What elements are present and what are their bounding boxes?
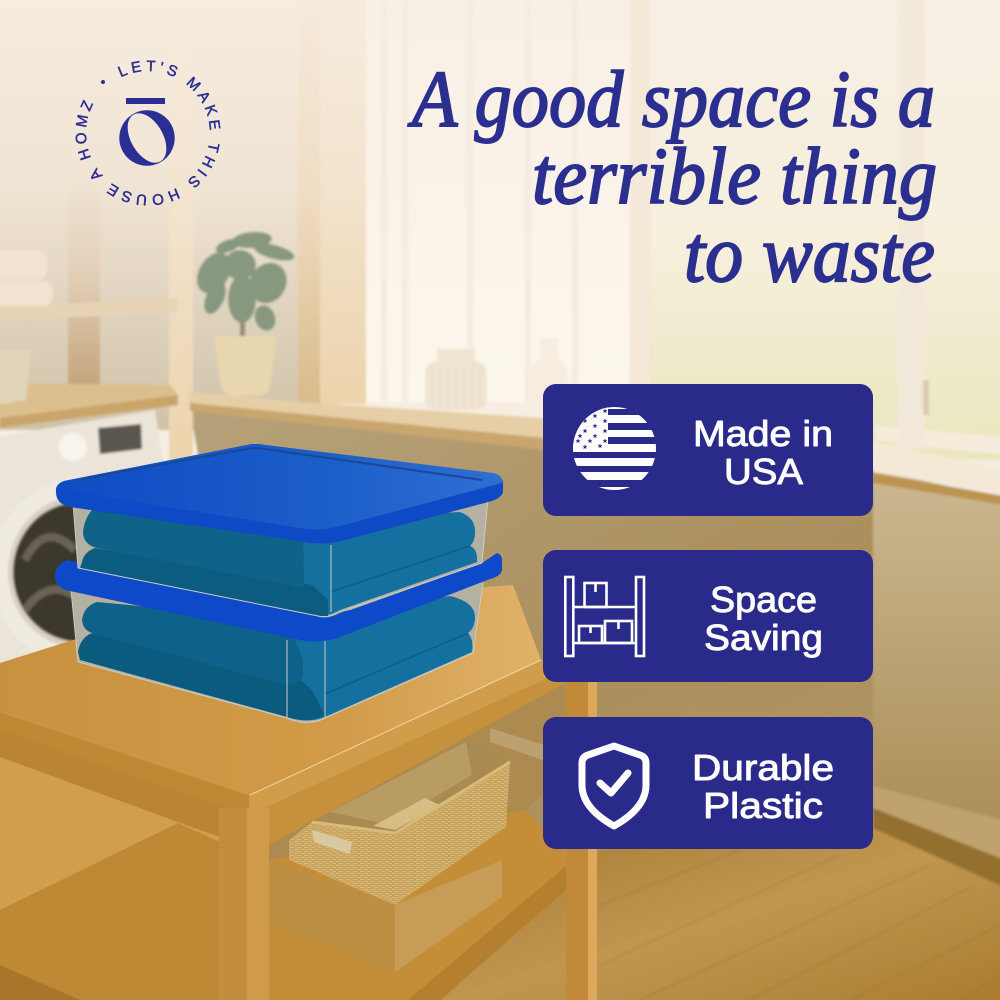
lid top surface (58, 444, 502, 530)
plant leaves (190, 230, 296, 337)
floor (430, 828, 1000, 1000)
lower blanket right (280, 596, 475, 720)
recessed lip (80, 448, 482, 482)
storage box lower (269, 860, 502, 972)
headline: A good space is a (407, 56, 935, 144)
ceramic vase (425, 349, 487, 410)
panel: durable plastic (543, 717, 873, 849)
woven basket (289, 740, 510, 905)
label: Durable (692, 747, 834, 788)
baseboard shadow (873, 808, 1000, 892)
lower table shelf left (0, 823, 220, 1000)
stacked storage bins (55, 444, 503, 722)
lower blanket upper roll (82, 602, 303, 685)
table apron right (240, 660, 565, 850)
lower wall (190, 410, 1000, 890)
wicker basket on shelf (0, 350, 32, 405)
upper lid (56, 444, 503, 544)
upper bin clear body (73, 495, 488, 617)
side table (0, 585, 597, 1000)
shelf front corner left (0, 965, 80, 1000)
lower bin edge (71, 583, 483, 722)
label (692, 747, 834, 826)
logo badge (76, 60, 220, 206)
skirting behind table (490, 728, 566, 768)
headline (407, 56, 937, 299)
upper bin (73, 495, 488, 617)
table top surface (0, 585, 541, 795)
panel: space saving (543, 550, 873, 682)
plant pot (214, 336, 277, 396)
upper blanket fold (330, 546, 470, 592)
panel: made in usa (543, 384, 873, 516)
soap bottle (528, 338, 568, 404)
left alcove wall (0, 0, 310, 430)
sheer curtain (362, 0, 650, 405)
dark wall between apron and shelf (268, 675, 565, 860)
lower blanket fold (325, 633, 468, 694)
label: Made in (693, 413, 833, 454)
baseboard (873, 786, 1000, 862)
right rear leg (566, 680, 597, 1000)
long wooden shelf (188, 392, 545, 450)
sill wood edge (873, 473, 1000, 506)
icon: american flag circle (572, 407, 658, 491)
lower left shelf (0, 383, 178, 428)
headline: terrible thing (532, 133, 937, 221)
label: USA (724, 451, 803, 492)
lower shelf front edge (408, 860, 573, 1000)
icon: shield with check (582, 746, 646, 826)
window sill right (873, 442, 1000, 495)
table slab edge left (0, 712, 249, 815)
washing machine (0, 410, 172, 690)
highlight edge (250, 660, 541, 795)
ring dot (101, 80, 105, 84)
front leg (219, 808, 269, 1000)
logo bar (126, 98, 165, 104)
floor planks (600, 850, 1000, 1000)
table apron left (0, 722, 230, 837)
label: Plastic (703, 785, 823, 826)
window with garden view (630, 0, 1000, 460)
logo o (119, 110, 175, 166)
potted plant (190, 230, 296, 396)
logo o counter (120, 107, 174, 169)
lower wall right side (873, 470, 1000, 825)
upper blanket lower roll (80, 548, 328, 616)
floor area under table (0, 735, 220, 1000)
circular tagline: LET'S MAKE THIS HOUSE A HOMZ (76, 60, 220, 206)
folded towels (0, 250, 53, 306)
icon: shelving with boxes (565, 577, 644, 656)
floor base (400, 820, 1000, 1000)
right window frame post (875, 0, 1000, 455)
headline: to waste (684, 211, 935, 299)
washer door (0, 478, 172, 666)
label: Space (710, 579, 817, 620)
ring path (86, 71, 210, 195)
table slab edge right (249, 660, 565, 815)
wall shelving uprights (68, 0, 366, 460)
upper bin edge (73, 498, 488, 617)
upper blanket right (300, 512, 477, 615)
label (693, 413, 833, 492)
upper blanket upper roll (83, 505, 304, 588)
lower lid (55, 553, 502, 642)
lower table shelf right (268, 810, 573, 1000)
lower bin (71, 578, 483, 722)
upper left shelf (0, 298, 178, 321)
label: Saving (704, 617, 823, 658)
lid rim (56, 444, 503, 544)
lower blanket lower roll (78, 633, 325, 720)
lower bin clear body (71, 578, 483, 722)
label (704, 579, 823, 658)
